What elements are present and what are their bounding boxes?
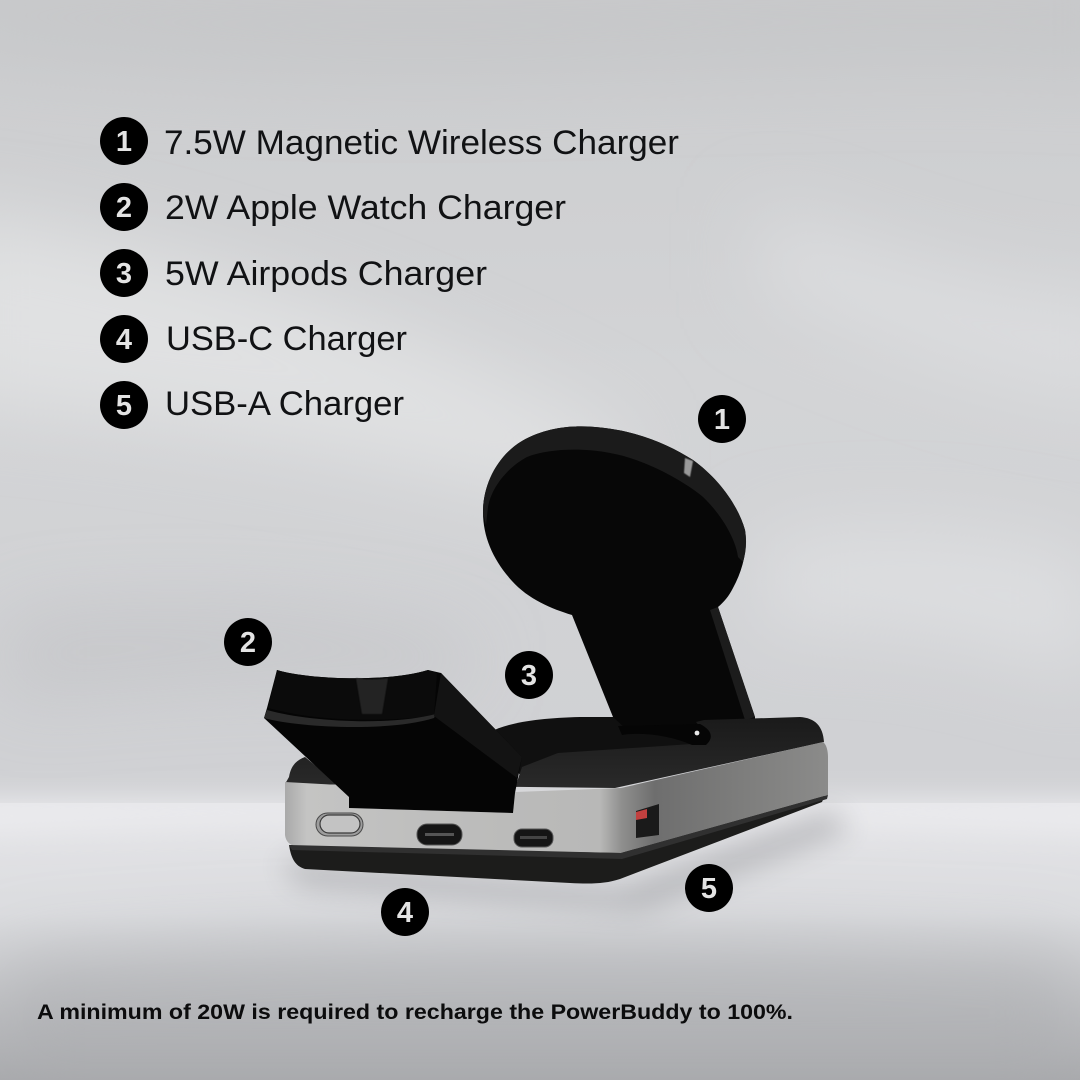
callout 2: 2 [240, 627, 256, 659]
callout 1: 1 [714, 404, 730, 436]
list item 3: 5W Airpods Charger [165, 255, 487, 293]
USB-A port [636, 804, 659, 838]
power button [316, 813, 363, 836]
list item 1 [100, 117, 679, 165]
list item 5 [100, 381, 404, 429]
device shadow on floor [280, 810, 850, 910]
band lower edge [289, 795, 828, 859]
callout 3: 3 [521, 660, 537, 692]
list item 2: 2 [116, 192, 132, 224]
list item 4 [100, 315, 407, 363]
callout 4: 4 [397, 897, 413, 929]
rim highlight [684, 458, 693, 477]
callout 5 [685, 864, 733, 912]
product: charging station [264, 426, 828, 884]
disc rim [483, 426, 746, 562]
list item 4: 4 [116, 324, 132, 356]
micro USB port [514, 829, 553, 847]
stem side [710, 607, 755, 720]
rear dock [490, 717, 720, 775]
callout 5: 5 [701, 873, 717, 905]
list item 5: 5 [116, 390, 132, 422]
callout 4 [381, 888, 429, 936]
list item 5: USB-A Charger [165, 385, 404, 423]
charging pad recess [618, 724, 711, 745]
callout 3 [505, 651, 553, 699]
list item 3: 3 [116, 258, 132, 290]
list item 1: 7.5W Magnetic Wireless Charger [164, 124, 679, 162]
silver band [285, 742, 828, 853]
feature list [100, 117, 679, 429]
list item 2: 2W Apple Watch Charger [165, 189, 566, 227]
callout 1 [698, 395, 746, 443]
list item 1: 1 [116, 126, 132, 158]
list item 4: USB-C Charger [166, 320, 407, 358]
list item 3 [100, 249, 487, 297]
charger front edge [264, 710, 436, 727]
callout 2 [224, 618, 272, 666]
charger gloss highlight [356, 678, 388, 714]
USB-C port [417, 824, 462, 845]
apple watch charger [264, 670, 522, 813]
magnetic wireless charger stand [483, 426, 755, 728]
pad light [695, 731, 699, 735]
charger top gloss [268, 670, 437, 720]
top leather body [285, 717, 824, 790]
charger side edge [434, 673, 522, 778]
bottom leather base [289, 790, 827, 884]
list item 2 [100, 183, 566, 231]
footnote: A minimum of 20W is required to recharge the PowerBuddy to 100%. [37, 1001, 793, 1024]
